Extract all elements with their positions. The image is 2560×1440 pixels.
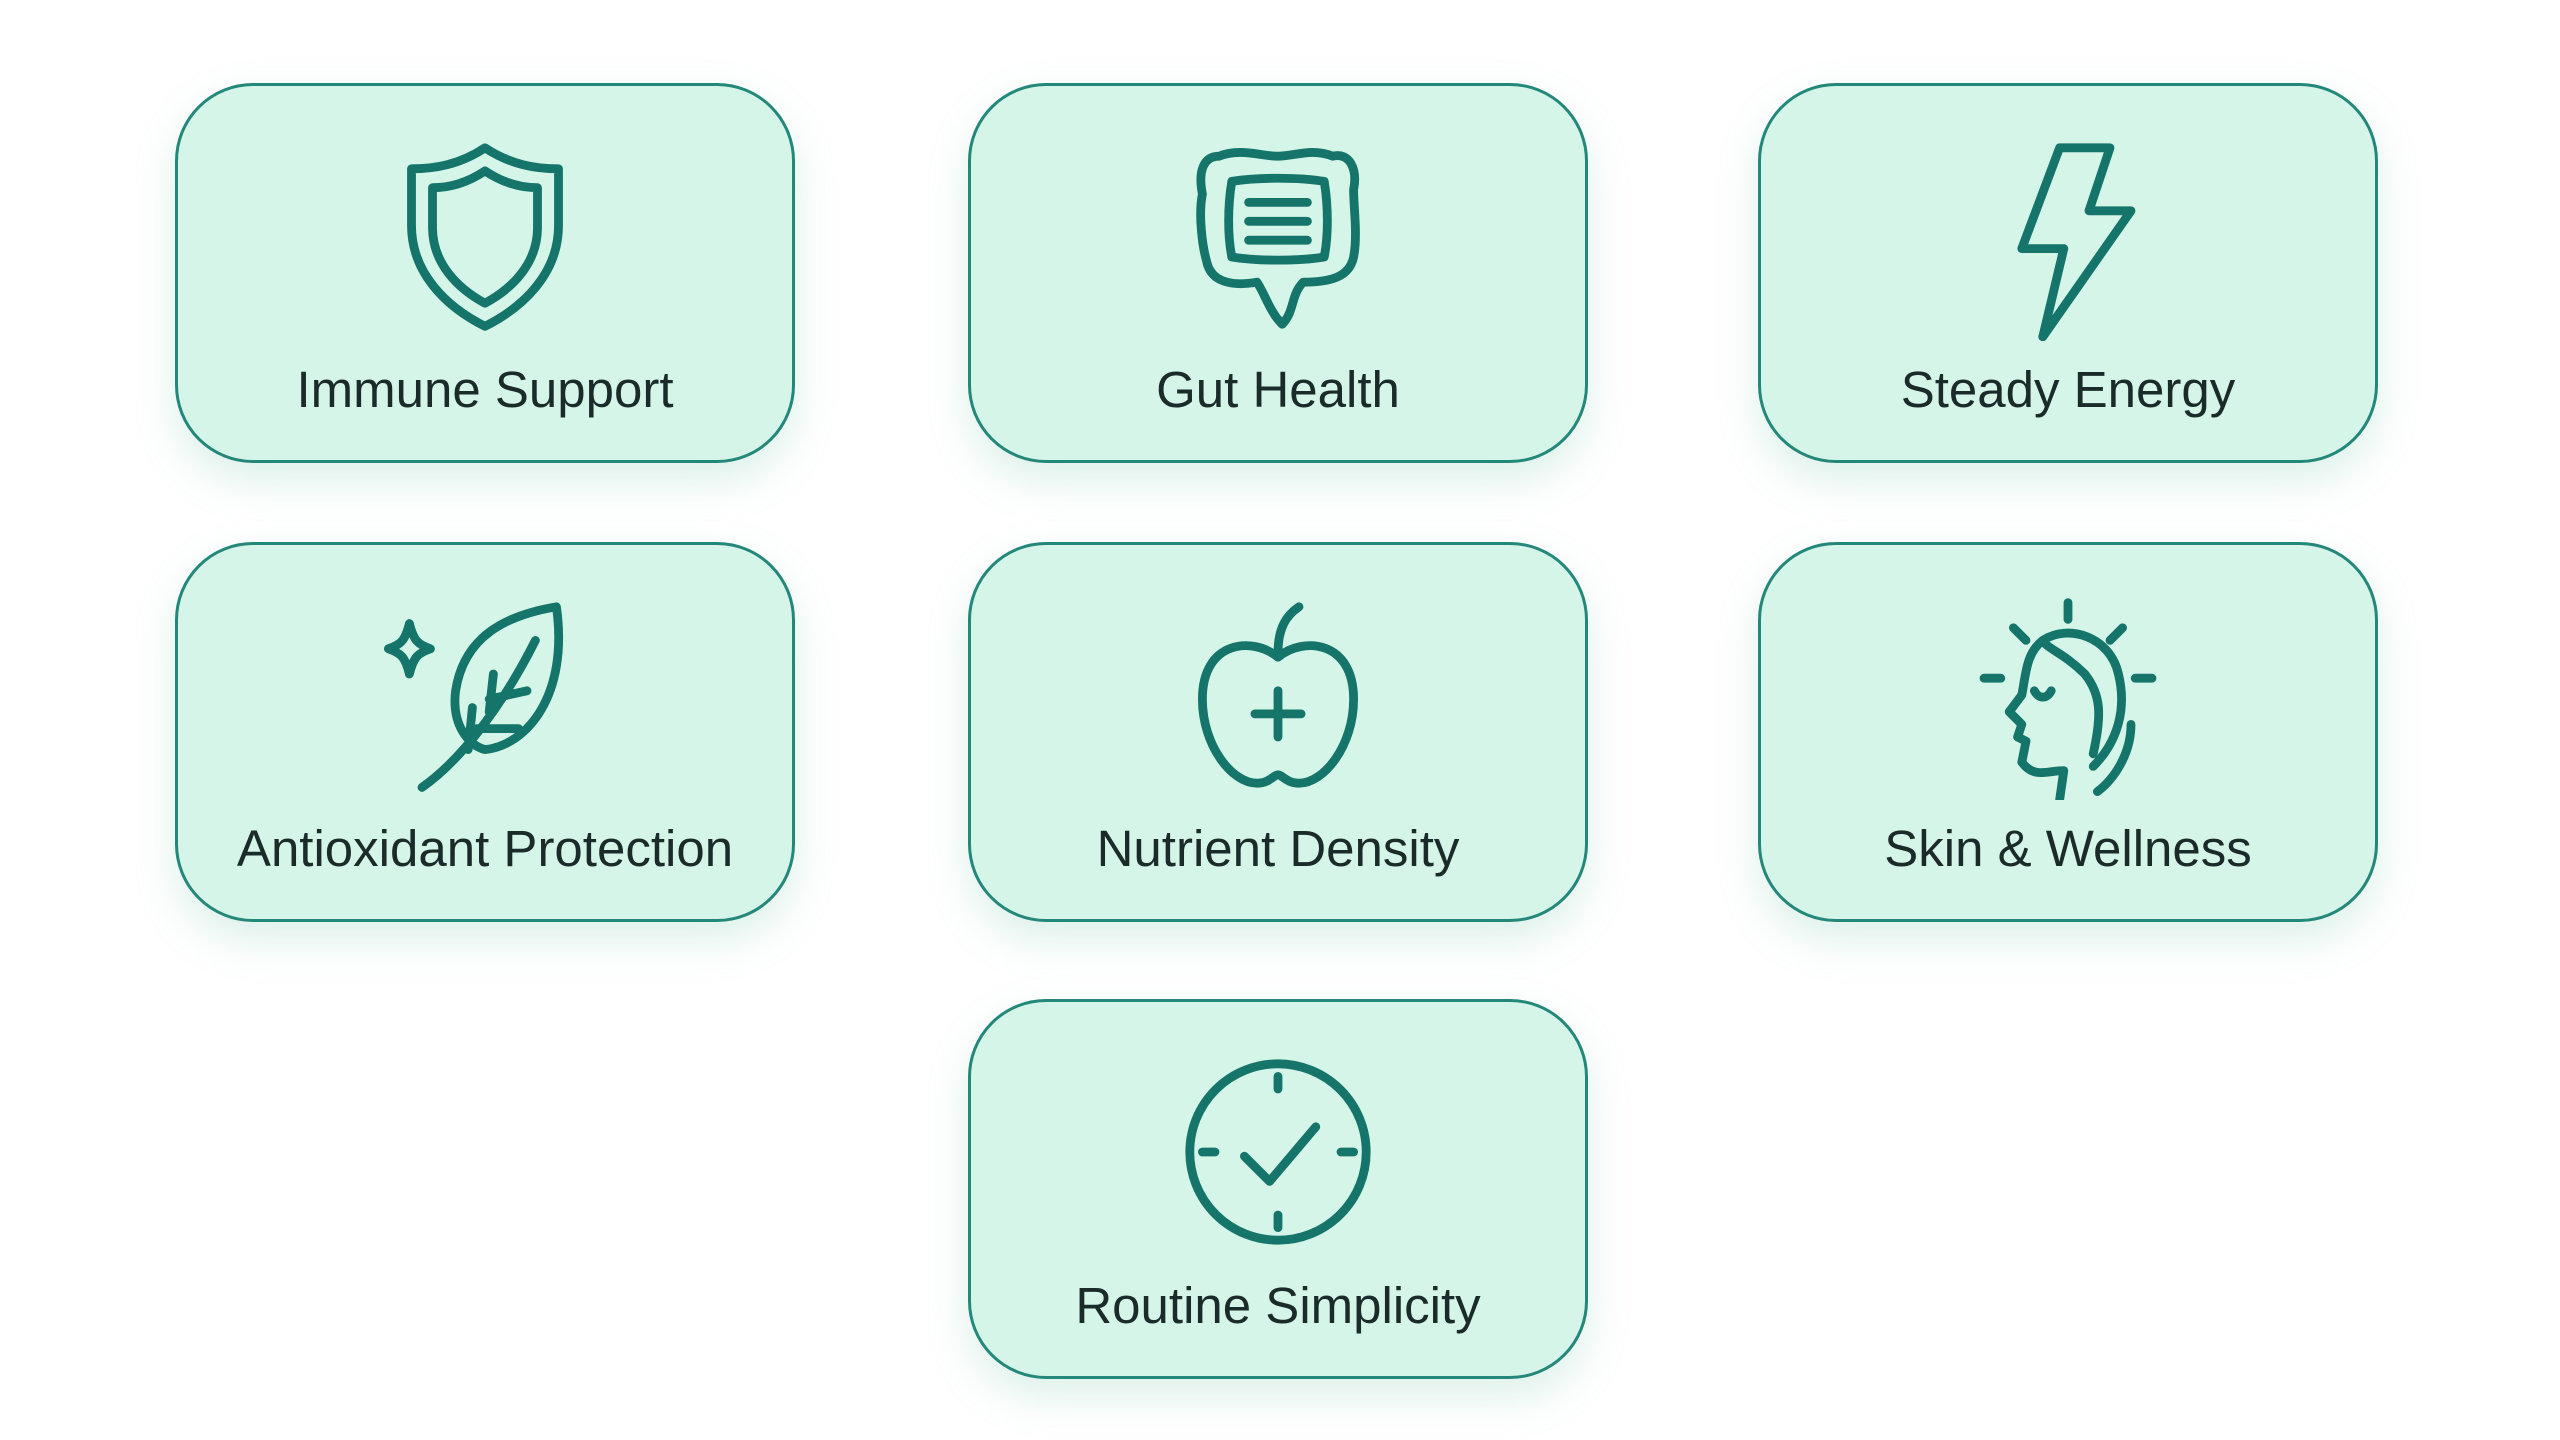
card: gut health: [968, 83, 1588, 463]
card: steady energy: [1758, 83, 2378, 463]
label: Skin & Wellness: [1884, 820, 2252, 877]
card: immune support: [175, 83, 795, 463]
label: Gut Health: [1156, 361, 1400, 418]
label: Nutrient Density: [1097, 820, 1459, 877]
label: Immune Support: [296, 361, 674, 418]
icon: face profile with rays: [1980, 598, 2156, 800]
icon: leaf with sparkle: [384, 602, 564, 792]
icon: shield: [407, 143, 563, 331]
icon: apple with plus: [1198, 602, 1358, 788]
icon: lightning bolt: [2017, 143, 2136, 341]
card: antioxidant protection: [175, 542, 795, 922]
icon: clock with check: [1185, 1059, 1371, 1245]
label: Steady Energy: [1901, 361, 2235, 418]
card: routine simplicity: [968, 999, 1588, 1379]
card: skin & wellness: [1758, 542, 2378, 922]
label: Antioxidant Protection: [237, 820, 733, 877]
icon: intestine: [1196, 148, 1360, 329]
label: Routine Simplicity: [1075, 1277, 1481, 1334]
card: nutrient density: [968, 542, 1588, 922]
